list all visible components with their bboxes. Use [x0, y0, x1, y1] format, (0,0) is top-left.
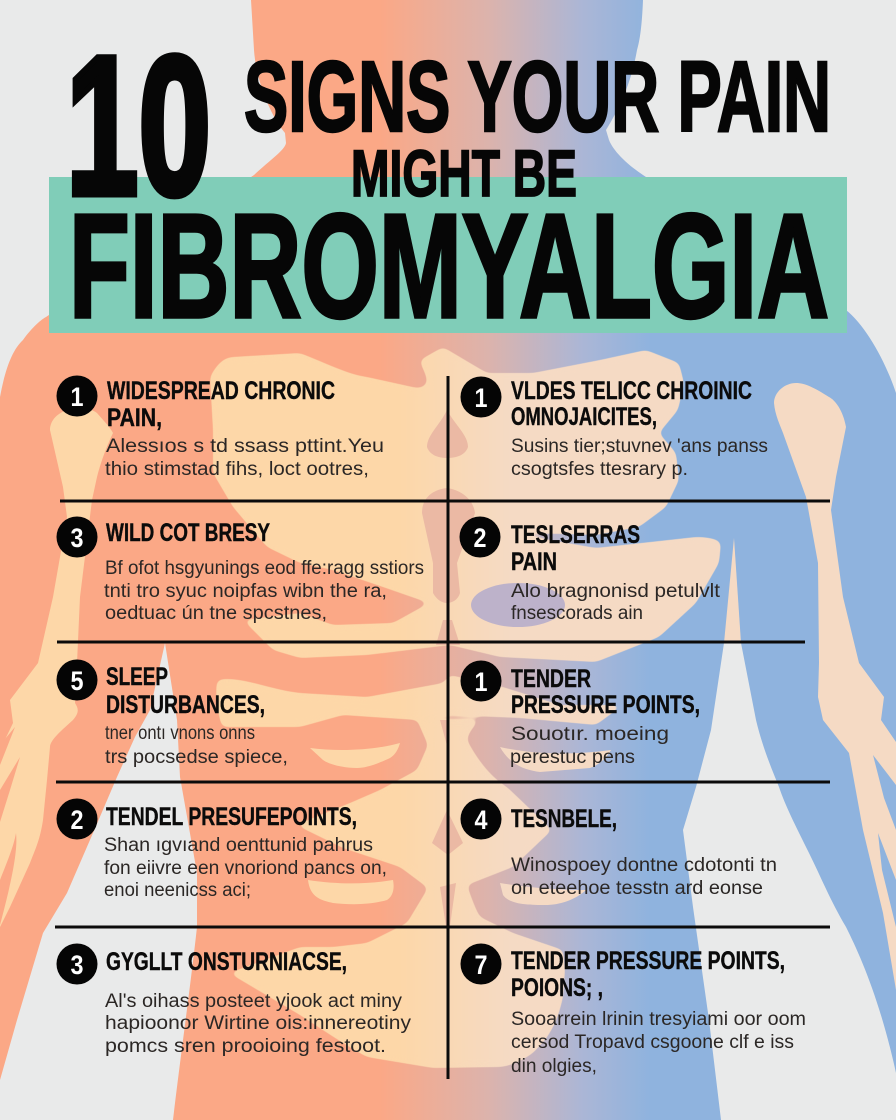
- icon: right hand slits: [873, 755, 896, 927]
- panel: item 2 left: 2: [70, 805, 84, 835]
- panel: item 1 right: Susins tier;stuvnev 'ans panss: [511, 436, 768, 457]
- icon: rib cage and pelvis: [210, 347, 721, 1068]
- panel: item 2 right: [460, 516, 721, 624]
- panel: item 1 left: [56, 376, 384, 480]
- panel: item 1 tender right: PRESSURE POINTS,: [511, 691, 700, 719]
- panel: item 3 left: tnti tro syuc noipfas wibn the ra,: [104, 581, 387, 602]
- panel: item 7 right: TENDER PRESSURE POINTS,: [511, 947, 785, 975]
- panel: item 1 tender right: 1: [474, 667, 488, 697]
- panel: item 7 right: din olgies,: [511, 1056, 597, 1077]
- icon: left hand slits: [0, 727, 20, 925]
- panel: item 5 left: SLEEP: [106, 663, 168, 691]
- icon: lower ribs and pelvis: [229, 720, 565, 1068]
- panel: item 3 lower left: Al's oihass posteet yjook act miny: [105, 991, 403, 1012]
- panel: item 3 left: Bf ofot hsgyunings eod ffe:ragg sstiors: [105, 558, 424, 579]
- icon: upper rib cage: [210, 347, 721, 662]
- panel: item 1 right: [460, 376, 768, 480]
- panel: item 2 left: Shan ıgvıand oenttunid pahrus: [104, 835, 373, 856]
- panel: item 2 right: 2: [474, 523, 486, 553]
- icon: right lower smile rib: [500, 883, 586, 905]
- panel: item 1 left: WIDESPREAD CHRONIC: [107, 377, 335, 405]
- panel: item 1 right: csogtsfes ttesrary p.: [511, 459, 688, 480]
- panel: item 5 left: tner ontı vnons onns: [105, 723, 255, 744]
- title: 10: [66, 15, 211, 236]
- panel: item 1 left: thio stimstad fihs, loct ootres,: [105, 459, 369, 480]
- panel: item 2 right: fnsescorads ain: [511, 603, 643, 624]
- panel: item 3 lower left: GYGLLT ONSTURNIACSE,: [106, 948, 347, 976]
- icon: lavender rib shadow: [471, 583, 565, 627]
- icon: spine: [422, 410, 475, 940]
- panel: item 4 right: [460, 798, 777, 899]
- panel: item 3 left: 3: [70, 523, 84, 553]
- panel: item 1 tender right: Souotır. moeing: [511, 724, 669, 745]
- panel: item 3 left: WILD COT BRESY: [106, 519, 270, 547]
- panel: item 1 tender right: TENDER: [511, 665, 591, 693]
- panel: item 2 left: TENDEL PRESUFEPOINTS,: [106, 803, 357, 831]
- panel: item 7 right: 7: [474, 950, 488, 980]
- panel: item 7 right: Sooarrein lrinin tresyiami oor oom: [511, 1009, 806, 1030]
- panel: item 4 right: on eteehoe tesstn ard eonse: [511, 878, 763, 899]
- panel: item 4 right: Winospoey dontne cdotonti tn: [511, 855, 777, 876]
- panel: item 1 left: Alessıos s td ssass pttint.Yeu: [106, 436, 384, 457]
- icon: right upper smile rib: [500, 747, 611, 772]
- title: [66, 15, 831, 349]
- panel: item 5 left: DISTURBANCES,: [106, 691, 265, 719]
- icon: left arm bone: [0, 407, 113, 927]
- panel: item 1 right: 1: [474, 383, 488, 413]
- panel: item 1 left: 1: [70, 382, 84, 412]
- panel: title banner: [49, 177, 847, 333]
- panel: item 2 right: Alo bragnonisd petulvlt: [511, 581, 721, 602]
- panel: item 1 tender right: perestuc pens: [510, 747, 635, 768]
- icon: inner arm spike: [724, 538, 741, 643]
- grid dividers: [55, 376, 830, 1079]
- panel: item 3 left: oedtuac ún tne spcstnes,: [105, 603, 327, 624]
- icon: right arm bone: [774, 383, 896, 990]
- panel: item 2 right: PAIN: [511, 548, 557, 576]
- panel: item 3 lower left: 3: [70, 950, 84, 980]
- panel: item 3 left: [56, 516, 424, 624]
- panel: item 2 left: fon eiivre een vnoriond pancs on,: [104, 858, 387, 879]
- title: MIGHT BE: [351, 136, 577, 210]
- panel: item 7 right: [460, 944, 806, 1077]
- panel: item 5 left: trs pocsedse spiece,: [105, 747, 288, 768]
- icon: left upper smile rib: [310, 743, 400, 768]
- panel: item 3 lower left: [56, 944, 412, 1057]
- panel: item 2 left: enoi neenicss aci;: [104, 880, 251, 901]
- icon: middle rib: [216, 675, 623, 727]
- panel: item 3 lower left: pomcs sren prooioing festoot.: [105, 1036, 386, 1057]
- panel: item 2 left: [56, 798, 387, 901]
- skeleton illustration: [0, 347, 896, 1068]
- panel: item 2 right: TESLSERRAS: [511, 521, 640, 549]
- panel: item 1 right: VLDES TELICC CHROINIC: [511, 377, 752, 405]
- panel: item 5 left: [56, 660, 288, 768]
- panel: item 7 right: cersod Tropavd csgoone clf e iss: [511, 1032, 794, 1053]
- panel: item 1 right: OMNOJAICITES,: [511, 403, 657, 431]
- panel: item 7 right: POIONS; ,: [511, 974, 603, 1002]
- icon: left lower smile rib: [308, 880, 394, 904]
- panel: item 4 right: TESNBELE,: [511, 805, 617, 833]
- panel: item 3 lower left: hapioonor Wirtine ois:innereotiny: [105, 1013, 412, 1034]
- panel: item 4 right: 4: [474, 805, 488, 835]
- panel: item 5 left: 5: [70, 666, 84, 696]
- panel: item 1 tender right: [460, 660, 700, 768]
- panel: item 1 left: PAIN,: [107, 404, 162, 432]
